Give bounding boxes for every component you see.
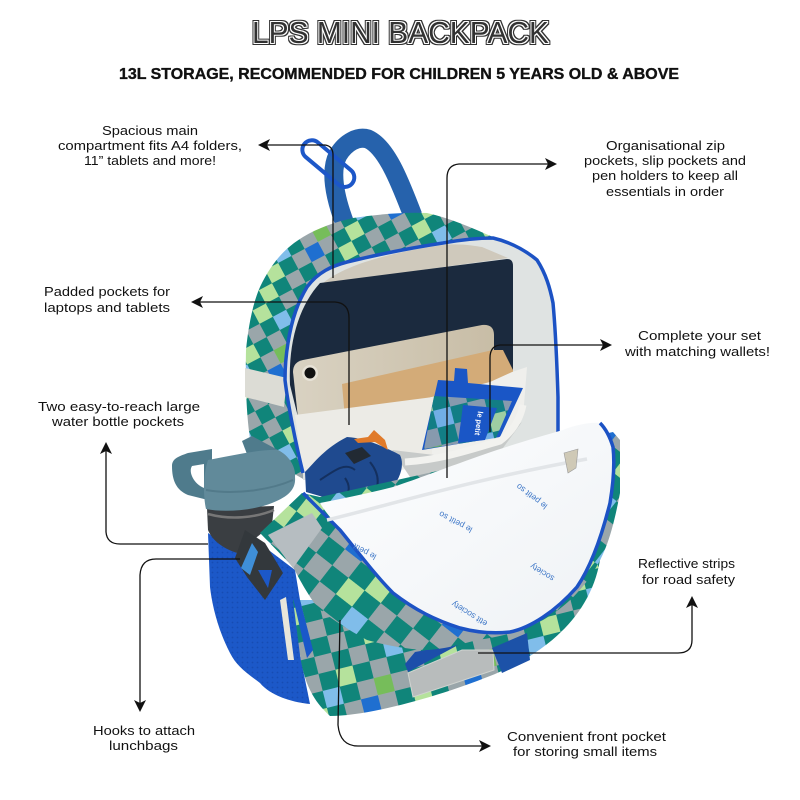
text: main compartment: compartment fits A4 folders,	[58, 138, 242, 153]
text: padded pockets: Padded pockets for	[44, 284, 171, 299]
tablet camera	[302, 365, 318, 381]
printed lining text	[351, 481, 556, 629]
zip pull	[564, 449, 578, 473]
notebook	[342, 350, 513, 418]
text: reflective strips: for road safety	[642, 572, 735, 587]
handle strap	[334, 138, 413, 224]
text: front pocket: for storing small items	[513, 744, 657, 759]
front flap checker	[260, 432, 620, 650]
printed lining text: le petit so	[514, 481, 549, 511]
arrow: main compartment	[258, 139, 333, 278]
arrow: front pocket	[338, 620, 491, 752]
text: padded pockets: laptops and tablets	[44, 300, 170, 315]
right organiser pocket	[400, 367, 527, 470]
text: main compartment: 11” tablets and more!	[84, 153, 216, 168]
lower front body	[293, 480, 620, 716]
organiser gray base	[392, 422, 522, 492]
arrow: padded pockets	[191, 296, 349, 425]
interior lining	[285, 238, 558, 480]
white front pocket	[295, 397, 433, 472]
bottle body	[207, 506, 274, 553]
text: organisational pockets: essentials in order	[606, 184, 725, 199]
printed lining text: etit society	[449, 599, 489, 629]
front reflective strip	[408, 650, 494, 697]
side zipper pocket edge	[293, 598, 313, 658]
printed lining text: le petit	[351, 541, 378, 562]
text: main compartment: Spacious main	[102, 123, 198, 138]
text: hooks: Hooks to attach	[93, 723, 195, 738]
interior cream panel	[322, 244, 508, 284]
white pocket interior	[320, 423, 614, 633]
zipper edge of main compartment	[285, 238, 558, 473]
text: organisational pockets: Organisational zip	[606, 138, 725, 153]
back panel checker	[246, 213, 493, 480]
carabiner clip	[298, 136, 358, 191]
backpack illustration	[172, 136, 620, 716]
dark laptop	[290, 259, 513, 425]
wallet	[422, 368, 523, 450]
arrow: hooks	[134, 559, 240, 712]
text: main compartment	[58, 123, 242, 168]
bottle handle	[172, 449, 212, 500]
text: hooks: lunchbags	[109, 738, 178, 753]
text: padded pockets	[44, 284, 171, 315]
arrow: wallets	[490, 339, 612, 432]
zipper pull	[280, 597, 294, 660]
side reflective strip	[245, 368, 287, 407]
front tab	[492, 633, 530, 673]
side buckle	[235, 530, 283, 600]
text: matching wallets	[624, 328, 770, 359]
cap nub	[242, 436, 278, 462]
organiser rim	[405, 405, 523, 462]
text: water bottle pockets: water bottle pockets	[51, 414, 184, 429]
arrow: water bottle pockets	[100, 442, 208, 544]
subtitle: 13L STORAGE, RECOMMENDED FOR CHILDREN 5 YEARS OLD & ABOVE	[119, 66, 679, 83]
text: water bottle pockets: Two easy-to-reach large	[38, 399, 200, 414]
flap zipper edge	[303, 423, 614, 633]
text: matching wallets: with matching wallets!	[624, 344, 770, 359]
text: matching wallets: Complete your set	[638, 328, 761, 343]
printed lining text: society	[528, 561, 556, 584]
water bottle	[172, 436, 295, 553]
printed lining text: le petit so	[437, 509, 474, 535]
text: organisational pockets: pen holders to keep all	[592, 168, 738, 183]
tablet	[293, 325, 494, 418]
wallet label: le petit	[473, 411, 485, 436]
pocket zip	[327, 459, 587, 520]
mesh side pocket	[208, 533, 310, 704]
flap reflective strip	[268, 513, 322, 568]
folded umbrella	[305, 430, 402, 499]
text: reflective strips	[638, 556, 735, 587]
text: front pocket: Convenient front pocket	[507, 729, 666, 744]
text: water bottle pockets	[38, 399, 200, 429]
bottle cap	[204, 450, 295, 511]
navy front pocket shadow	[405, 644, 460, 672]
arrow: reflective strips	[478, 596, 698, 653]
text: front pocket	[507, 729, 666, 759]
text: organisational pockets	[584, 138, 746, 199]
text: organisational pockets: pockets, slip pockets and	[584, 153, 746, 168]
arrow: organisational pockets	[447, 158, 557, 478]
text: hooks	[93, 723, 195, 753]
text: reflective strips: Reflective strips	[638, 556, 735, 571]
title: LPS MINI BACKPACK	[252, 15, 549, 50]
